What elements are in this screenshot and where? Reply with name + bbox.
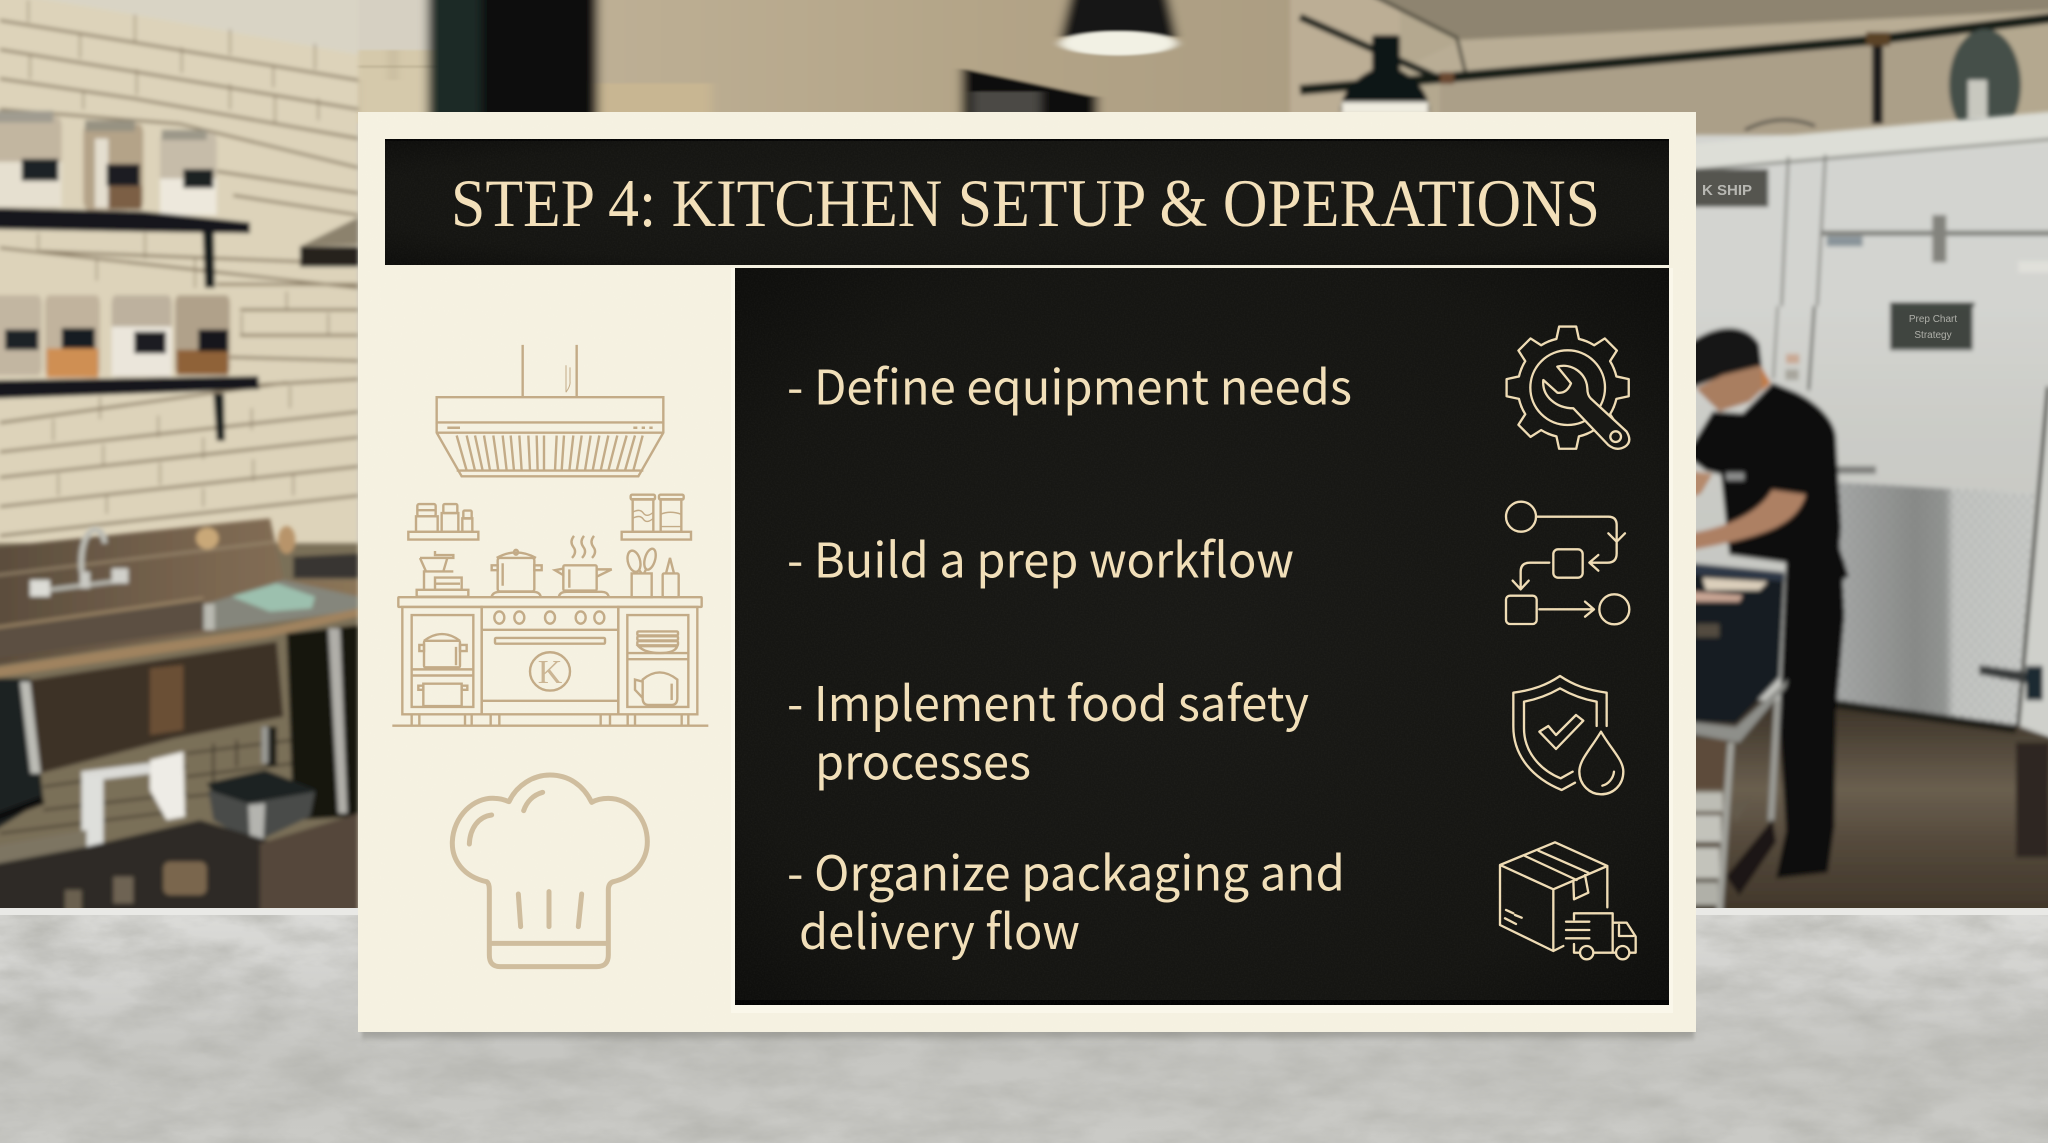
bullet: organize packaging and delivery flow: delivery flow — [799, 893, 1080, 963]
background: concrete countertop — [0, 908, 2048, 1143]
cook figure — [1686, 739, 1726, 788]
hood — [437, 345, 663, 476]
photo sign: door: Strategy — [1914, 330, 1952, 341]
icon: workflow — [1506, 502, 1629, 624]
cabinet cookware — [418, 631, 678, 706]
icon: oven monogram: K — [538, 654, 563, 691]
background: stainless sink unit — [0, 518, 358, 917]
photo sign: ship: K SHIP — [1702, 182, 1752, 199]
background: cook, crate and diamond plate door — [1686, 306, 2048, 922]
icon: box and delivery truck — [1500, 842, 1636, 959]
photo sign: door — [1909, 314, 1957, 341]
panel: bullet list — [735, 268, 1669, 1005]
bullet: build a prep workflow: - Build a prep workflow — [787, 522, 1294, 592]
panel: title bar — [385, 139, 1669, 265]
bullet: define equipment needs: - Define equipment needs — [787, 348, 1352, 418]
shelf with jars right — [622, 495, 691, 540]
bullet: implement food safety processes — [787, 665, 1309, 794]
jars — [0, 111, 230, 378]
counter and range — [392, 597, 708, 726]
background: top centre of kitchen photo — [324, 0, 1444, 123]
shelves — [0, 208, 250, 233]
steaming pan — [555, 536, 612, 596]
bullet: implement food safety processes: processes — [815, 724, 1031, 794]
bullet: organize packaging and delivery flow — [787, 834, 1345, 963]
icon: chef hat — [452, 775, 647, 967]
coffee machine — [417, 551, 468, 597]
pot on burner — [492, 550, 542, 596]
bullet: implement food safety processes: - Implement food safety — [787, 665, 1309, 735]
photo sign: door: Prep Chart — [1909, 314, 1957, 325]
title: STEP 4: KITCHEN SETUP & OPERATIONS — [451, 165, 1600, 241]
panel: cream card — [358, 112, 1696, 1038]
icon: kitchen line art — [392, 345, 708, 726]
crate — [1686, 563, 1784, 723]
shelf with jars left — [408, 504, 478, 540]
icon: gear and wrench — [1507, 327, 1629, 449]
utensils and bottle — [625, 547, 679, 597]
background: right walk-in cooler upper section — [1670, 111, 2048, 762]
bullet: organize packaging and delivery flow: - Organize packaging and — [787, 834, 1345, 904]
icon: shield with check and drop — [1513, 676, 1623, 794]
background: left kitchen wall with shelves and jars — [0, 0, 358, 918]
background: upper right ceiling, pipes and pendant lamp — [1290, 0, 2048, 170]
